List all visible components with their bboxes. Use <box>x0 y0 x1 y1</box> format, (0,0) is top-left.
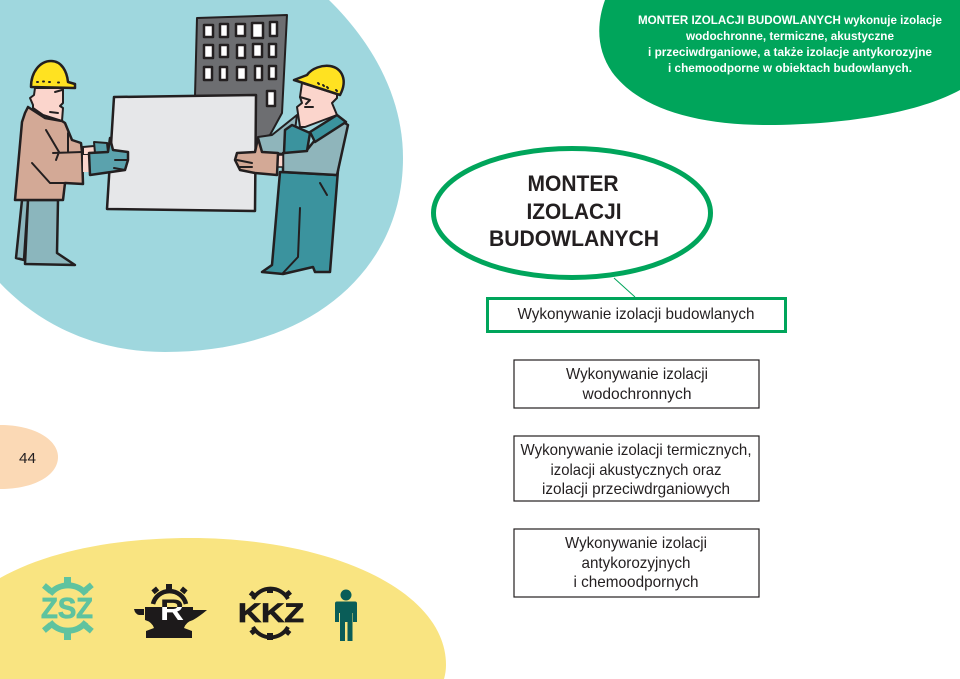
logo: KKZ: KKZ <box>238 598 304 628</box>
box: task two: Wykonywanie izolacji termicznych, <box>520 442 752 459</box>
page number badge: 44 <box>19 450 36 467</box>
left worker cuff <box>83 155 89 172</box>
panel: green description background <box>599 0 960 125</box>
heading ellipse: occupation name: IZOLACJI <box>526 199 622 224</box>
green box: main task: Wykonywanie izolacji budowlanych <box>518 306 754 323</box>
panel: yellow logo background <box>0 538 446 679</box>
logo: KKZ <box>238 587 304 640</box>
box: task two: izolacji przeciwdrganiowych <box>542 481 730 498</box>
illustration: building <box>195 15 287 140</box>
logo: anvil with R: R <box>160 594 184 627</box>
left worker trousers <box>16 200 75 265</box>
right worker sleeve <box>283 118 348 175</box>
logo: ZSZ <box>41 577 94 640</box>
box: task three: Wykonywanie izolacji <box>565 535 707 552</box>
heading ellipse: occupation name: MONTER <box>528 171 619 196</box>
right worker back arm <box>257 115 297 154</box>
icon: person <box>335 590 357 641</box>
box: task one: Wykonywanie izolacji <box>566 366 708 383</box>
right worker bib <box>284 125 310 153</box>
right worker cuff <box>277 155 283 167</box>
box: task one: wodochronnych <box>582 386 692 403</box>
illustration: panel carried by workers <box>107 95 256 211</box>
left worker glove <box>89 138 128 175</box>
description text: wodochronne, termiczne, akustyczne <box>685 29 894 43</box>
left worker helmet <box>31 61 75 88</box>
logo: ZSZ: ZSZ <box>41 593 93 625</box>
logo: anvil with R: R <box>160 594 184 627</box>
green box: main task <box>488 298 786 332</box>
description text: MONTER IZOLACJI BUDOWLANYCH wykonuje izolacje <box>638 13 942 27</box>
right worker overalls lower <box>262 130 345 274</box>
illustration: left worker <box>15 61 128 265</box>
box: task three <box>514 529 759 597</box>
right worker face <box>297 83 337 127</box>
left worker jacket <box>15 107 83 200</box>
box: task two: izolacji akustycznych oraz <box>550 462 722 479</box>
page number badge <box>0 425 58 489</box>
heading ellipse: occupation name: BUDOWLANYCH <box>489 226 659 251</box>
box: task three: antykorozyjnych <box>582 555 690 572</box>
description text: i chemoodporne w obiektach budowlanych. <box>668 61 912 75</box>
right worker hand <box>235 138 278 175</box>
illustration: right worker <box>235 66 348 274</box>
box: task one <box>514 360 759 408</box>
description text <box>638 13 942 75</box>
left worker face <box>30 88 63 121</box>
logo: anvil with R <box>134 584 207 638</box>
panel: blue illustration background <box>0 0 403 352</box>
right worker helmet <box>294 66 344 95</box>
description text: i przeciwdrganiowe, a także izolacje antykorozyjne <box>648 45 932 59</box>
box: task three: i chemoodpornych <box>574 574 698 591</box>
right worker strap <box>310 115 346 142</box>
box: task two <box>514 436 759 501</box>
connector line <box>614 278 635 297</box>
heading ellipse: occupation name <box>434 148 710 278</box>
left worker back hand <box>83 143 108 155</box>
